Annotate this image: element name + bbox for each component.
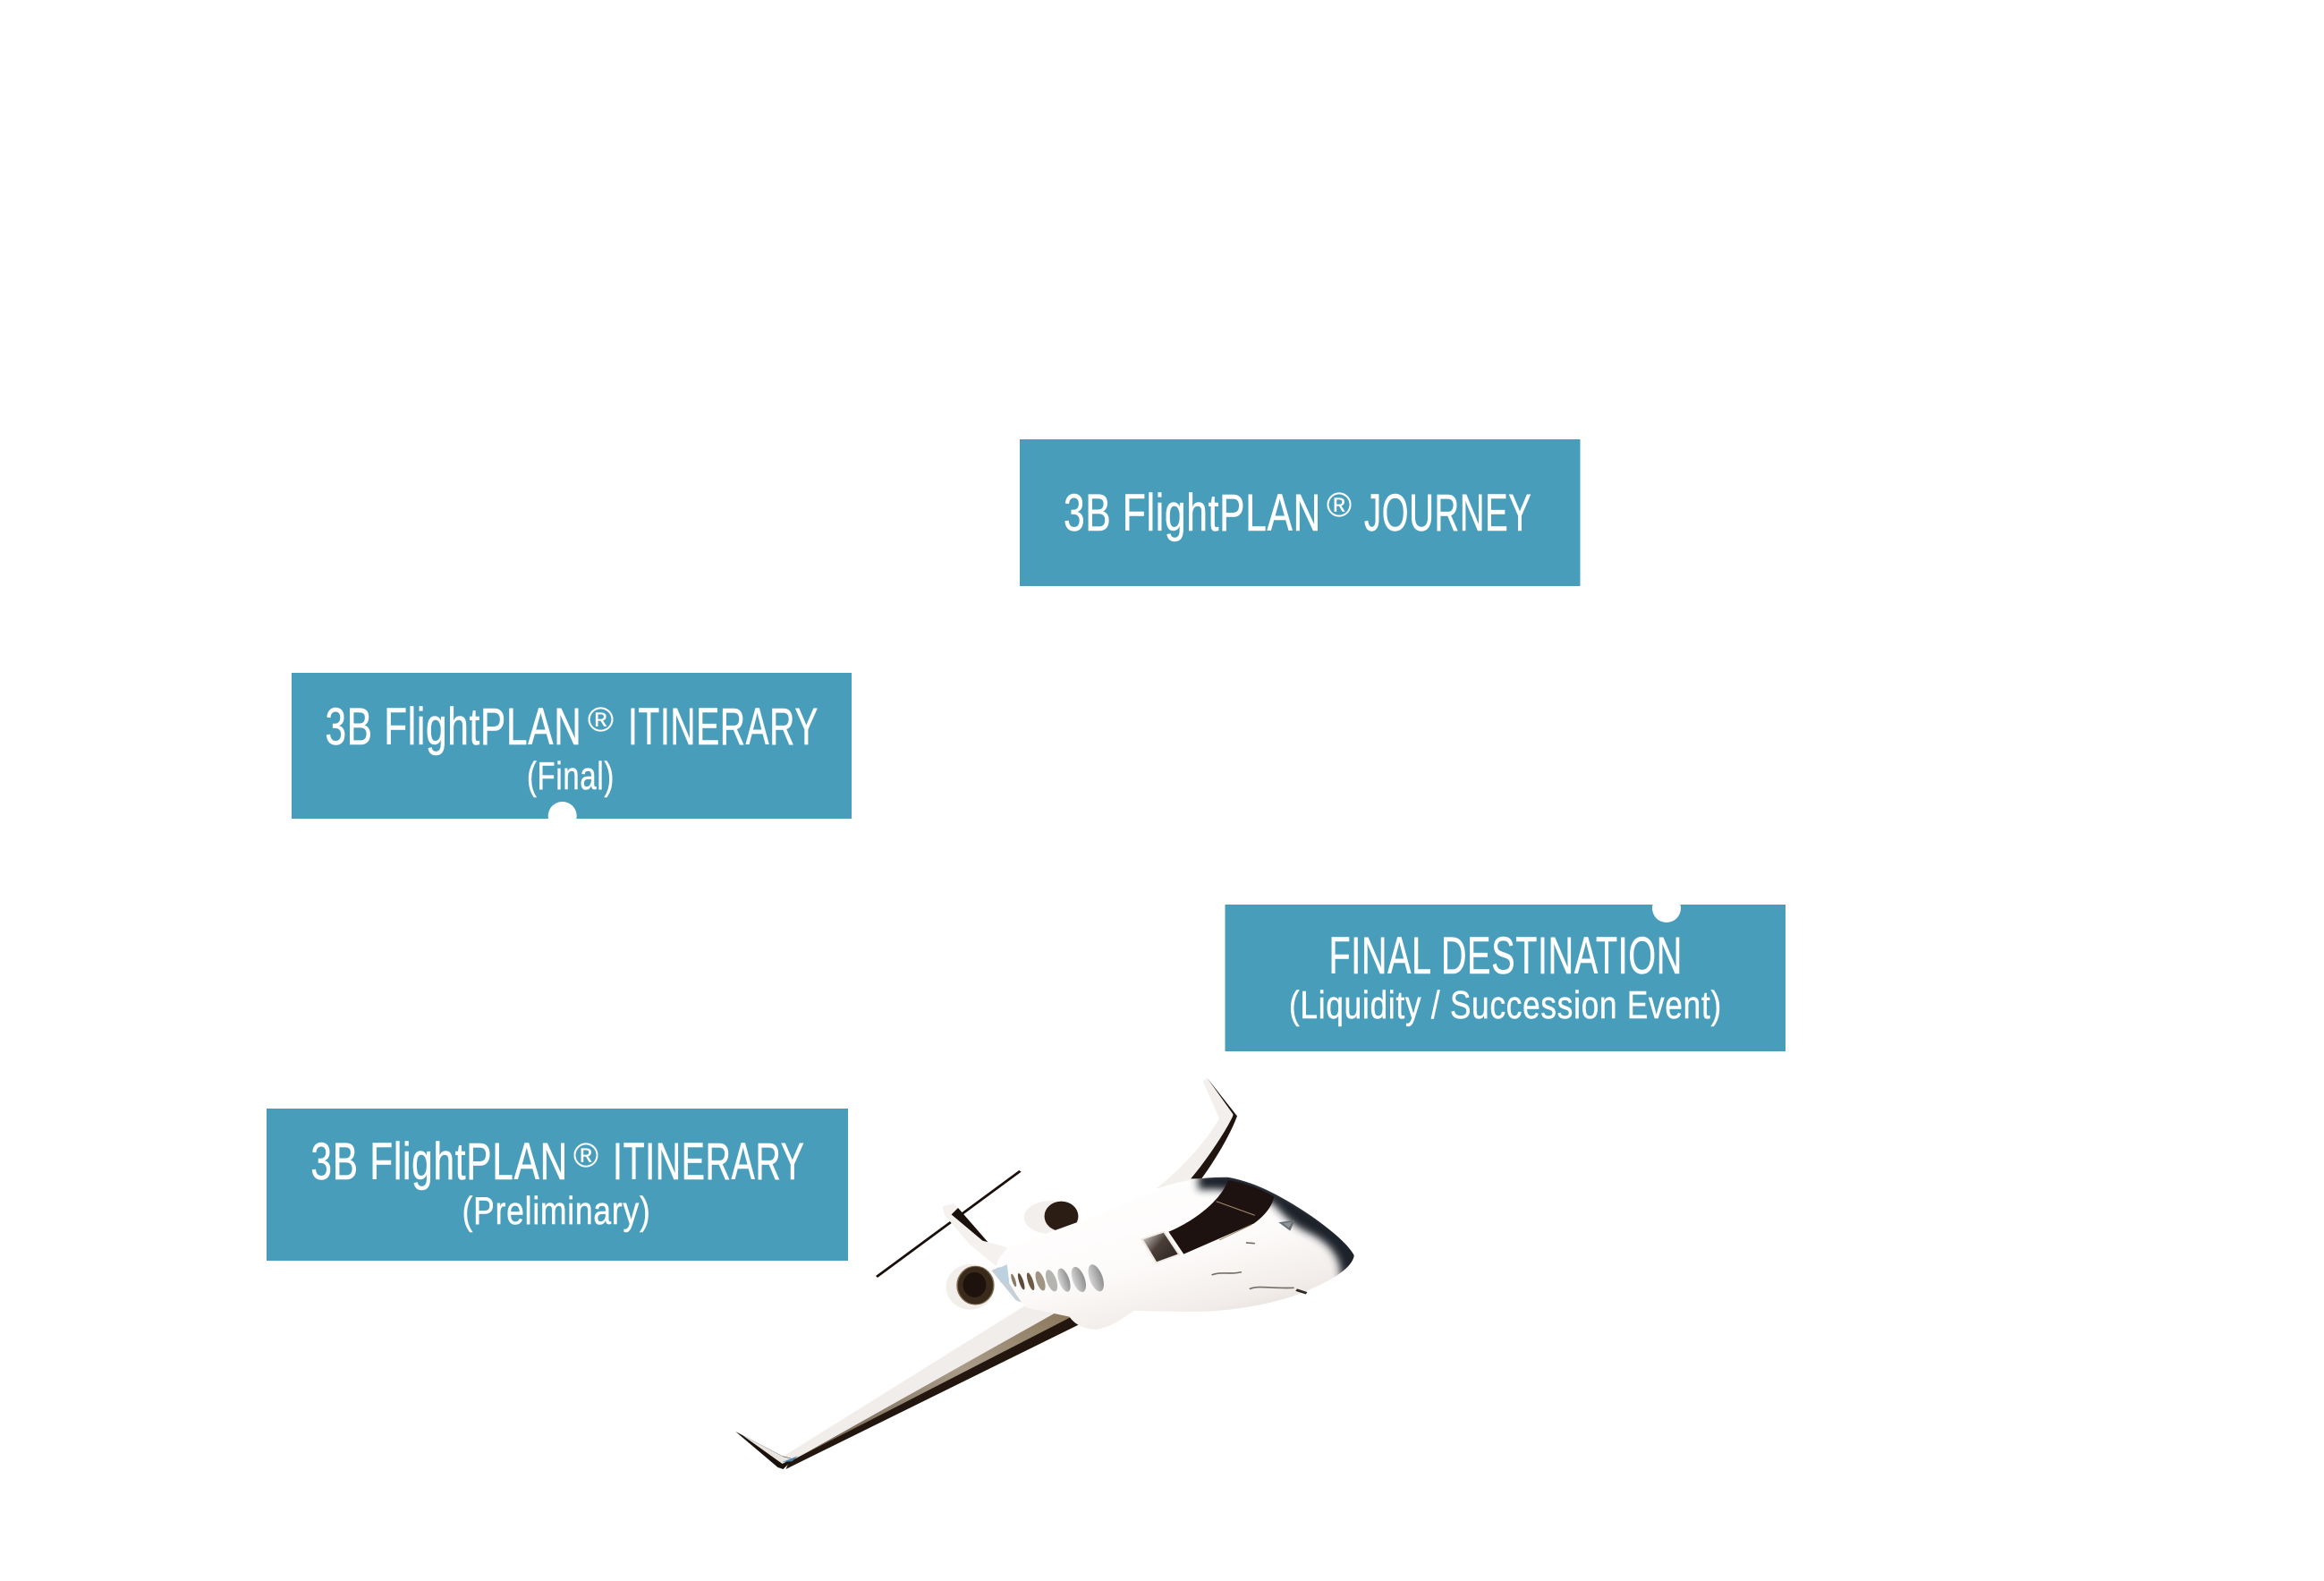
far wing xyxy=(1156,1078,1237,1188)
heading: final itinerary: ® xyxy=(588,701,614,739)
far engine xyxy=(1024,1201,1079,1234)
heading: journey: JOURNEY xyxy=(1364,484,1531,542)
heading: journey: 3B FlightPLAN xyxy=(1064,484,1321,542)
cockpit frame lines xyxy=(1217,1202,1255,1240)
tail fin xyxy=(943,1203,1007,1266)
route marker dot: final destination xyxy=(1652,894,1681,922)
infographic canvas xyxy=(267,439,1785,1469)
heading: preliminary itinerary: ® xyxy=(573,1137,598,1175)
near engine xyxy=(946,1264,994,1310)
icon: private jet xyxy=(735,1078,1363,1469)
fuselage xyxy=(997,1177,1354,1330)
subheading: preliminary: (Preliminary) xyxy=(462,1189,651,1233)
cabin windows xyxy=(1010,1263,1107,1293)
panel background: final destination xyxy=(1226,905,1785,1051)
tailplane xyxy=(876,1170,1022,1278)
windshield xyxy=(1168,1180,1274,1254)
route marker dot: final itinerary xyxy=(548,802,577,830)
panel: 3B FlightPLAN ITINERARY (Final) xyxy=(292,673,852,830)
panel: 3B FlightPLAN ITINERARY (Preliminary) xyxy=(267,1109,848,1261)
heading: journey: ® xyxy=(1327,487,1352,524)
fuselage surface details xyxy=(1212,1221,1307,1293)
nose shading xyxy=(1199,1172,1363,1279)
panel background: journey xyxy=(1020,439,1580,586)
subheading: liquidity or succession event: (Liquidity / Succession Event) xyxy=(1289,983,1722,1027)
cabin rear highlight xyxy=(997,1264,1009,1282)
side window xyxy=(1142,1232,1179,1262)
panel background: final itinerary xyxy=(292,673,852,819)
heading: preliminary itinerary: 3B FlightPLAN xyxy=(310,1133,568,1191)
heading: final itinerary: ITINERARY xyxy=(628,698,818,756)
heading: final itinerary: 3B FlightPLAN xyxy=(326,698,581,756)
engine pylon xyxy=(991,1264,1025,1304)
panel: 3B FlightPLAN JOURNEY xyxy=(1020,439,1580,586)
subheading: final: (Final) xyxy=(527,754,615,798)
panel background: preliminary itinerary xyxy=(267,1109,848,1261)
near wing xyxy=(735,1305,1080,1469)
heading: preliminary itinerary: ITINERARY xyxy=(613,1133,805,1191)
panel: FINAL DESTINATION xyxy=(1226,894,1785,1051)
heading: final destination: FINAL DESTINATION xyxy=(1329,927,1683,985)
